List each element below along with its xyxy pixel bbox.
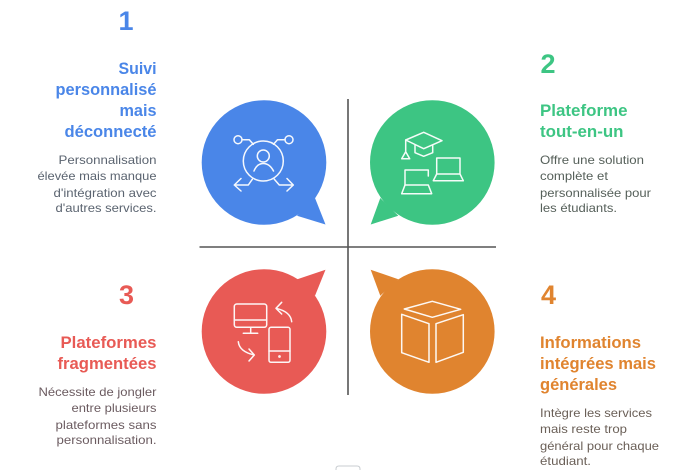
heading: Plateformes fragmentées: Plateformes	[60, 334, 156, 352]
speech bubble: green	[370, 100, 495, 225]
panel: quadrant 4 text	[540, 280, 659, 468]
heading: Plateforme tout-en-un	[540, 102, 628, 141]
description 2: complète et	[540, 169, 609, 183]
description 3: Nécessite de jongler	[38, 385, 156, 399]
icon: open box	[402, 301, 463, 362]
heading: Plateformes fragmentées	[58, 334, 156, 373]
heading: Suivi personnalisé mais déconnecté: personnalisé	[56, 81, 156, 99]
icon: person with connections	[234, 136, 293, 191]
description 2: Offre une solution	[540, 153, 644, 167]
description 2: personnalisée pour	[540, 186, 651, 200]
heading: Suivi personnalisé mais déconnecté: déconnecté	[64, 123, 156, 141]
icon: graduation cap and laptops	[402, 132, 463, 194]
number 1: 1	[118, 6, 134, 36]
panel: quadrant 2 text	[540, 49, 651, 215]
number 2: 2	[540, 49, 556, 79]
heading: Suivi personnalisé mais déconnecté	[56, 60, 156, 141]
number 4: 4	[541, 280, 556, 310]
description 4: général pour chaque	[540, 439, 659, 453]
heading: Plateformes fragmentées: fragmentées	[58, 355, 156, 373]
speech bubble: orange	[370, 269, 495, 394]
heading: Suivi personnalisé mais déconnecté: Suivi	[118, 60, 156, 78]
description 3: entre plusieurs	[72, 401, 156, 415]
panel: quadrant 1 text	[38, 6, 157, 215]
description 1: d'intégration avec	[54, 186, 156, 200]
description 4: mais reste trop	[540, 422, 627, 436]
heading: Informations intégrées mais générales	[540, 334, 656, 394]
description 4: Intègre les services	[540, 406, 652, 420]
description 1: Personnalisation	[58, 153, 156, 167]
description 4	[540, 406, 659, 468]
description 2	[540, 153, 651, 215]
description 1: d'autres services.	[56, 201, 156, 215]
description 2: les étudiants.	[540, 201, 617, 215]
icon: monitor and phone sync	[234, 302, 292, 362]
number 3: 3	[119, 280, 134, 310]
panel: quadrant 3 text	[38, 280, 156, 447]
speech bubble: red	[202, 269, 326, 394]
description 3: plateformes sans	[56, 418, 156, 432]
description 3: personnalisation.	[56, 433, 156, 447]
heading: Informations intégrées mais générales: intégrées mais	[540, 355, 656, 373]
description 1: élevée mais manque	[38, 169, 157, 183]
speech bubble: blue	[202, 100, 326, 225]
heading: Informations intégrées mais générales: Informations	[540, 334, 641, 352]
heading: Informations intégrées mais générales: générales	[540, 376, 617, 394]
description 1	[38, 153, 157, 215]
heading: Suivi personnalisé mais déconnecté: mais	[120, 102, 156, 120]
description 3	[38, 385, 156, 447]
heading: Plateforme tout-en-un: tout-en-un	[540, 123, 624, 141]
description 4: étudiant.	[540, 454, 591, 468]
heading: Plateforme tout-en-un: Plateforme	[540, 102, 628, 120]
